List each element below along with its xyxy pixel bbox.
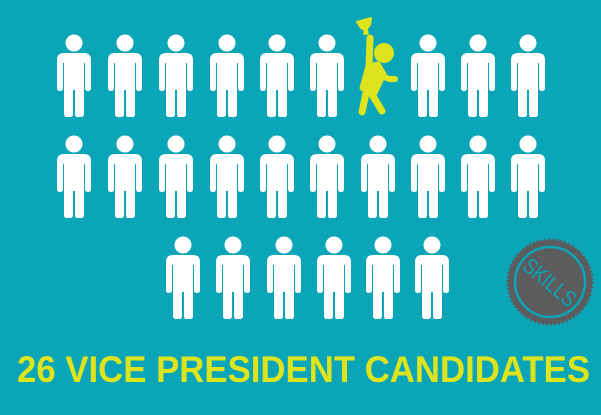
icon: winner figure with trophy	[357, 18, 395, 112]
row 3 of figures	[166, 236, 449, 319]
badge: skills stamp	[508, 240, 592, 324]
row 2 of figures	[57, 136, 545, 218]
badge: skills stamp: SKILLS	[518, 253, 581, 312]
row 1 of figures	[57, 34, 545, 117]
